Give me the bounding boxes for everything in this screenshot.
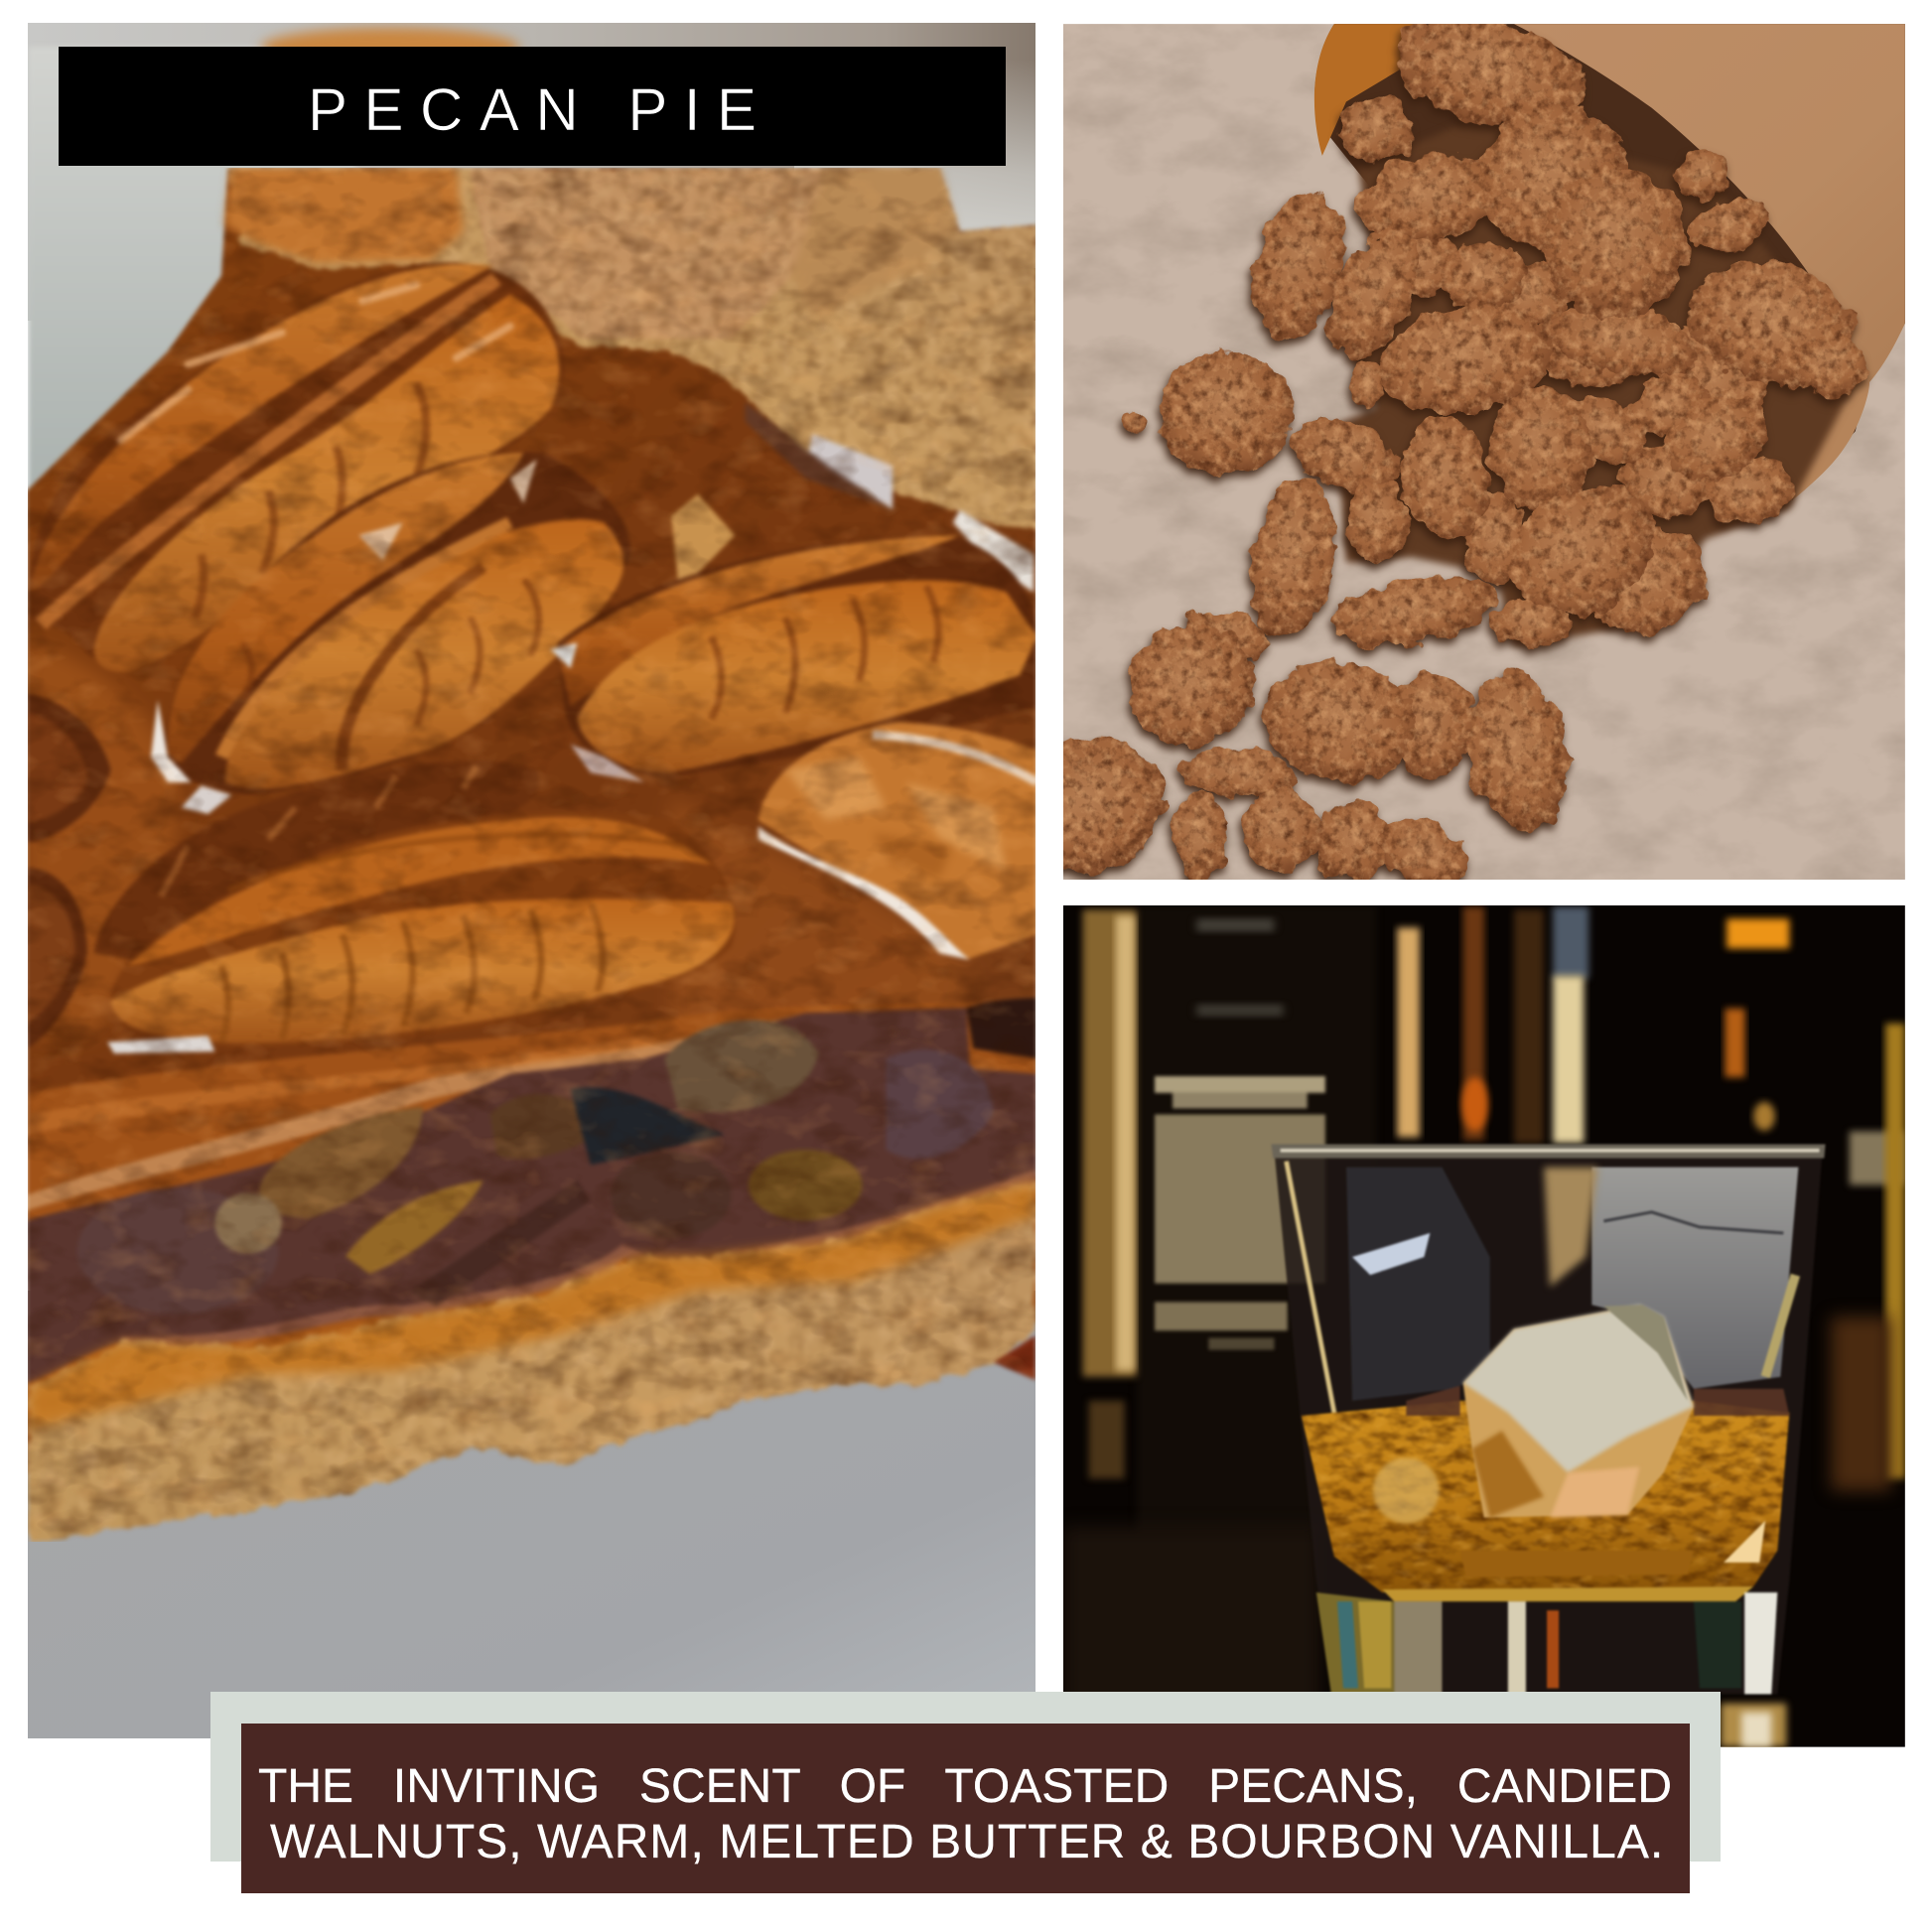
bottle label bbox=[1155, 918, 1325, 1350]
pie filling top: caramel and crust rim bbox=[27, 168, 1036, 1142]
paper surface bbox=[1063, 24, 1905, 881]
caption text bbox=[258, 1760, 1672, 1868]
pecan: centre bbox=[151, 452, 630, 814]
title text: PECAN PIE bbox=[308, 76, 757, 143]
pile shadow bbox=[1293, 120, 1862, 647]
whisky glass bbox=[1272, 1145, 1826, 1747]
pecan: large bottom bbox=[94, 760, 736, 1053]
candied pecans bbox=[999, 0, 1867, 897]
panel: pecan pie slice photo bbox=[28, 23, 1035, 1738]
caption backing panel bbox=[210, 1692, 1721, 1862]
caption panel bbox=[241, 1724, 1690, 1893]
caramel layer and filling bbox=[27, 1003, 1036, 1473]
ice cube bbox=[1463, 1305, 1694, 1518]
nuts in filling bbox=[77, 998, 1036, 1314]
crust bbox=[28, 1180, 1035, 1542]
whole pie bbox=[27, 168, 1036, 1542]
title banner bbox=[59, 47, 1006, 166]
panel: bourbon glass photo bbox=[1063, 905, 1905, 1747]
paper cone bbox=[1314, 24, 1905, 500]
caption text: WALNUTS, WARM, MELTED BUTTER & BOURBON VANILLA. bbox=[270, 1816, 1664, 1868]
caption text: THE INVITING SCENT OF TOASTED PECANS, CANDIED bbox=[258, 1760, 1672, 1813]
panel: candied pecans photo bbox=[1063, 24, 1905, 880]
pecan: upper left bbox=[29, 262, 564, 672]
pecans: small left edge bbox=[27, 694, 111, 1048]
pecan: right glazed bbox=[759, 722, 1036, 960]
pecan: right bbox=[550, 535, 1036, 782]
dark bar background with bottles bbox=[1063, 905, 1905, 1747]
plate background bbox=[28, 23, 1035, 1738]
